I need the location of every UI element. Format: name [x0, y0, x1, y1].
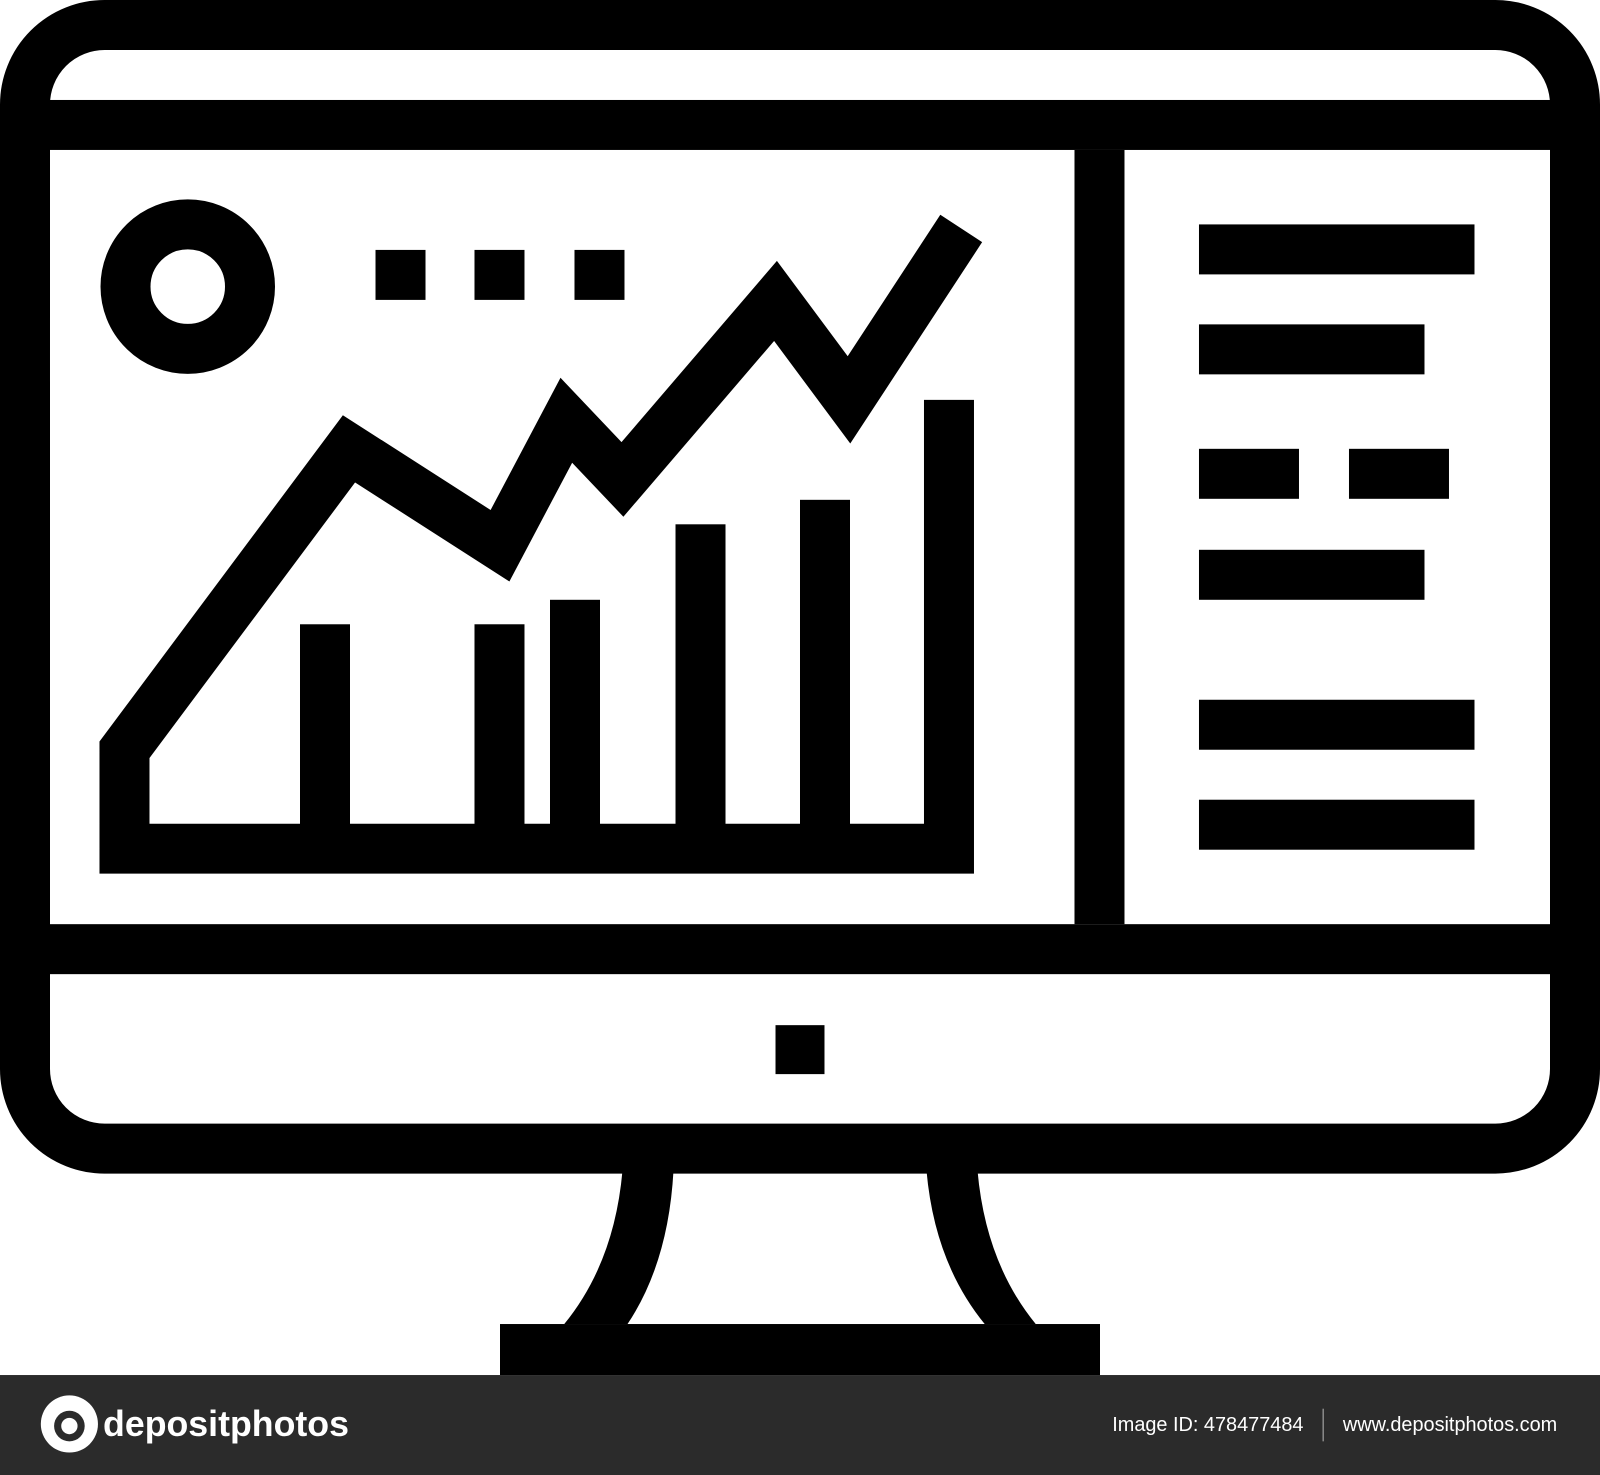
top bar: [50, 100, 1550, 150]
icon: dots: [376, 250, 624, 300]
panel: text lines: [1199, 224, 1474, 850]
chart: area line and frame: [124, 228, 961, 849]
power dot: [776, 1025, 824, 1074]
website: www.depositphotos.com: [1342, 1414, 1557, 1436]
icon: logo camera: [41, 1395, 98, 1453]
panel: chart: [124, 224, 961, 849]
monitor frame: [25, 25, 1575, 1149]
vertical divider: [1074, 150, 1124, 924]
chart: bars: [300, 500, 850, 828]
footer bar: [0, 1375, 1600, 1475]
stand: [500, 1171, 1100, 1375]
icon: circle: [126, 224, 250, 349]
logo text: depositphotos: [103, 1404, 349, 1444]
bottom divider: [50, 924, 1550, 974]
image id: Image ID: 478477484: [1112, 1414, 1303, 1436]
